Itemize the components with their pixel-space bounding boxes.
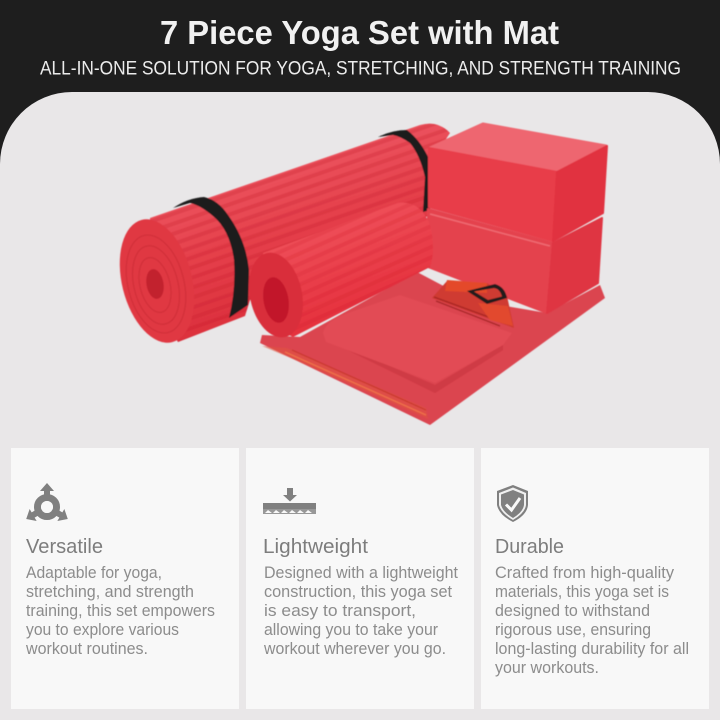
body text: you to explore various [26, 621, 179, 639]
body text: rigorous use, ensuring [495, 621, 651, 639]
large rolled mat [108, 124, 450, 351]
body text: is easy to transport, [264, 602, 416, 620]
panel: versatile [11, 448, 239, 709]
mat strap back [378, 130, 430, 212]
heading: Durable [495, 535, 564, 558]
upper yoga block [429, 124, 607, 241]
body text: long-lasting durability for all [495, 640, 689, 658]
body text: Designed with a lightweight [264, 564, 458, 582]
lower yoga block [428, 209, 602, 313]
mat end face [108, 211, 206, 351]
buckle [467, 284, 507, 304]
icon: weight on thin mat [263, 488, 316, 514]
body text: allowing you to take your [264, 621, 438, 639]
body text: stretching, and strength [26, 583, 194, 601]
product photo: yoga set [108, 124, 607, 425]
body text [25, 564, 215, 658]
yoga strap with buckle [432, 280, 514, 328]
body text [263, 564, 458, 658]
icon: three-way arrows [23, 483, 71, 525]
panel: durable [481, 448, 709, 709]
body text: construction, this yoga set [264, 583, 452, 601]
icon: shield with check [497, 485, 528, 522]
body text: Crafted from high-quality [495, 564, 675, 582]
small folded towel [323, 295, 512, 393]
heading: Versatile [26, 535, 103, 558]
heading: Lightweight [263, 535, 368, 558]
large towel [260, 272, 605, 425]
body text: Adaptable for yoga, [26, 564, 162, 582]
body text: workout wherever you go. [263, 640, 446, 658]
small rolled knee pad [242, 203, 433, 342]
mat strap front [173, 197, 249, 318]
body text: materials, this yoga set is [495, 583, 669, 601]
title: 7 Piece Yoga Set with Mat [160, 15, 559, 52]
body text: your workouts. [495, 659, 599, 677]
body text: workout routines. [25, 640, 148, 658]
knee pad end face [242, 248, 310, 342]
panel: lightweight [246, 448, 474, 709]
body text: training, this set empowers [26, 602, 215, 620]
body text [495, 564, 689, 677]
body text: designed to withstand [495, 602, 650, 620]
